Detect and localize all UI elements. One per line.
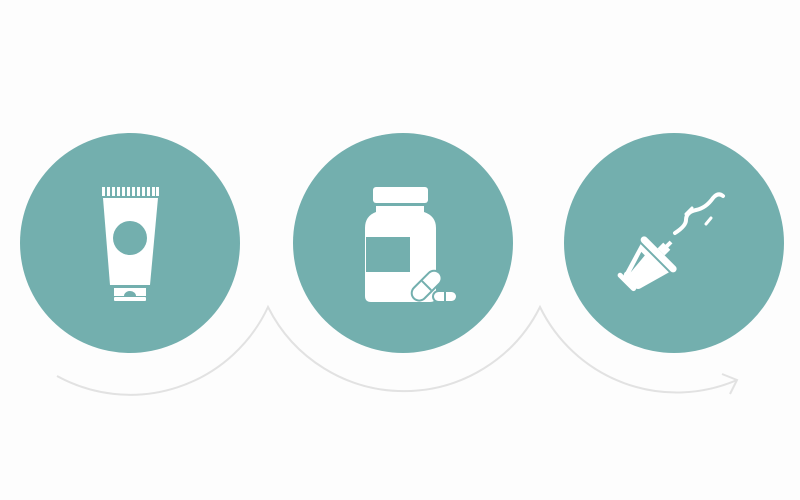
panel: tube circle bbox=[20, 133, 240, 353]
icon: pill bottle bbox=[365, 187, 458, 305]
panel: bottle circle bbox=[293, 133, 513, 353]
panel: cup circle bbox=[564, 133, 784, 353]
arrow: wavy timeline bbox=[57, 307, 737, 395]
icon: cream tube bbox=[102, 187, 159, 301]
icon: menstrual cup bbox=[610, 194, 723, 303]
